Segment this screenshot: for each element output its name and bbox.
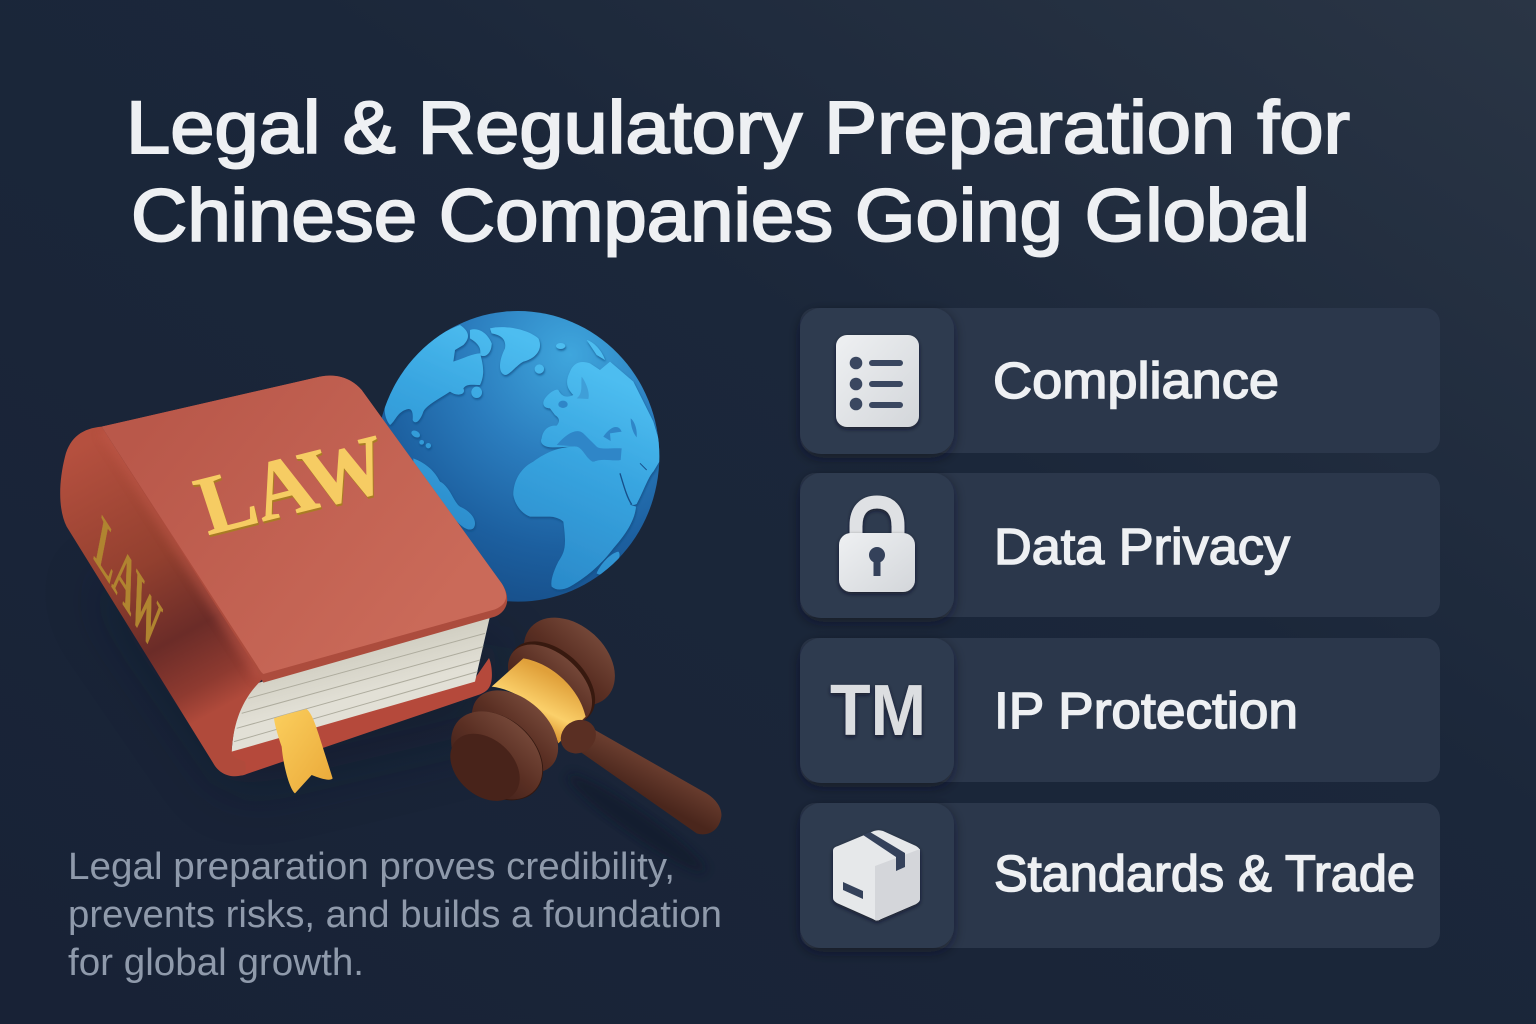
label: Standards & Trade bbox=[994, 845, 1415, 902]
icon: TM: TM bbox=[830, 671, 926, 751]
inland seas bbox=[557, 377, 637, 462]
gold lettering: LAW bbox=[90, 499, 166, 669]
back cover bbox=[227, 658, 492, 775]
Greenland bbox=[490, 327, 540, 375]
cover bbox=[102, 376, 506, 674]
spine bbox=[60, 427, 263, 776]
panel: data privacy bbox=[800, 473, 1440, 618]
Africa bbox=[513, 447, 636, 590]
gold lettering bbox=[90, 418, 401, 669]
panel: IP protection bbox=[800, 638, 1440, 783]
caption text block: for global growth. bbox=[68, 942, 364, 984]
icon: checklist bbox=[836, 335, 919, 427]
Eurasia bbox=[541, 362, 663, 505]
South America bbox=[413, 458, 475, 530]
illustration: law book, globe and gavel bbox=[60, 311, 721, 881]
caption text block bbox=[68, 846, 722, 984]
label: Data Privacy bbox=[994, 518, 1291, 575]
handle bbox=[580, 730, 721, 834]
panel: compliance bbox=[800, 308, 1440, 454]
caption text block: prevents risks, and builds a foundation bbox=[68, 894, 722, 936]
gold band bbox=[492, 658, 586, 743]
icon: globe bbox=[377, 311, 663, 602]
caption text block: Legal preparation proves credibility, bbox=[68, 846, 675, 888]
label: IP Protection bbox=[994, 682, 1298, 739]
title bbox=[126, 86, 1350, 257]
gold lettering: LAW bbox=[185, 418, 400, 553]
bookmark bbox=[274, 709, 333, 793]
North America bbox=[385, 325, 483, 425]
icon: box bbox=[833, 830, 920, 921]
icon: law book bbox=[60, 376, 507, 793]
title: Chinese Companies Going Global bbox=[131, 174, 1310, 257]
pages bbox=[232, 613, 491, 752]
icon: padlock bbox=[839, 502, 915, 592]
panel: standards and trade bbox=[800, 803, 1440, 948]
icon: gavel bbox=[434, 600, 721, 881]
gold lettering: LAW bbox=[186, 420, 401, 555]
title: Legal & Regulatory Preparation for bbox=[126, 86, 1350, 169]
cover lip bbox=[102, 376, 507, 683]
label: Compliance bbox=[993, 352, 1279, 409]
